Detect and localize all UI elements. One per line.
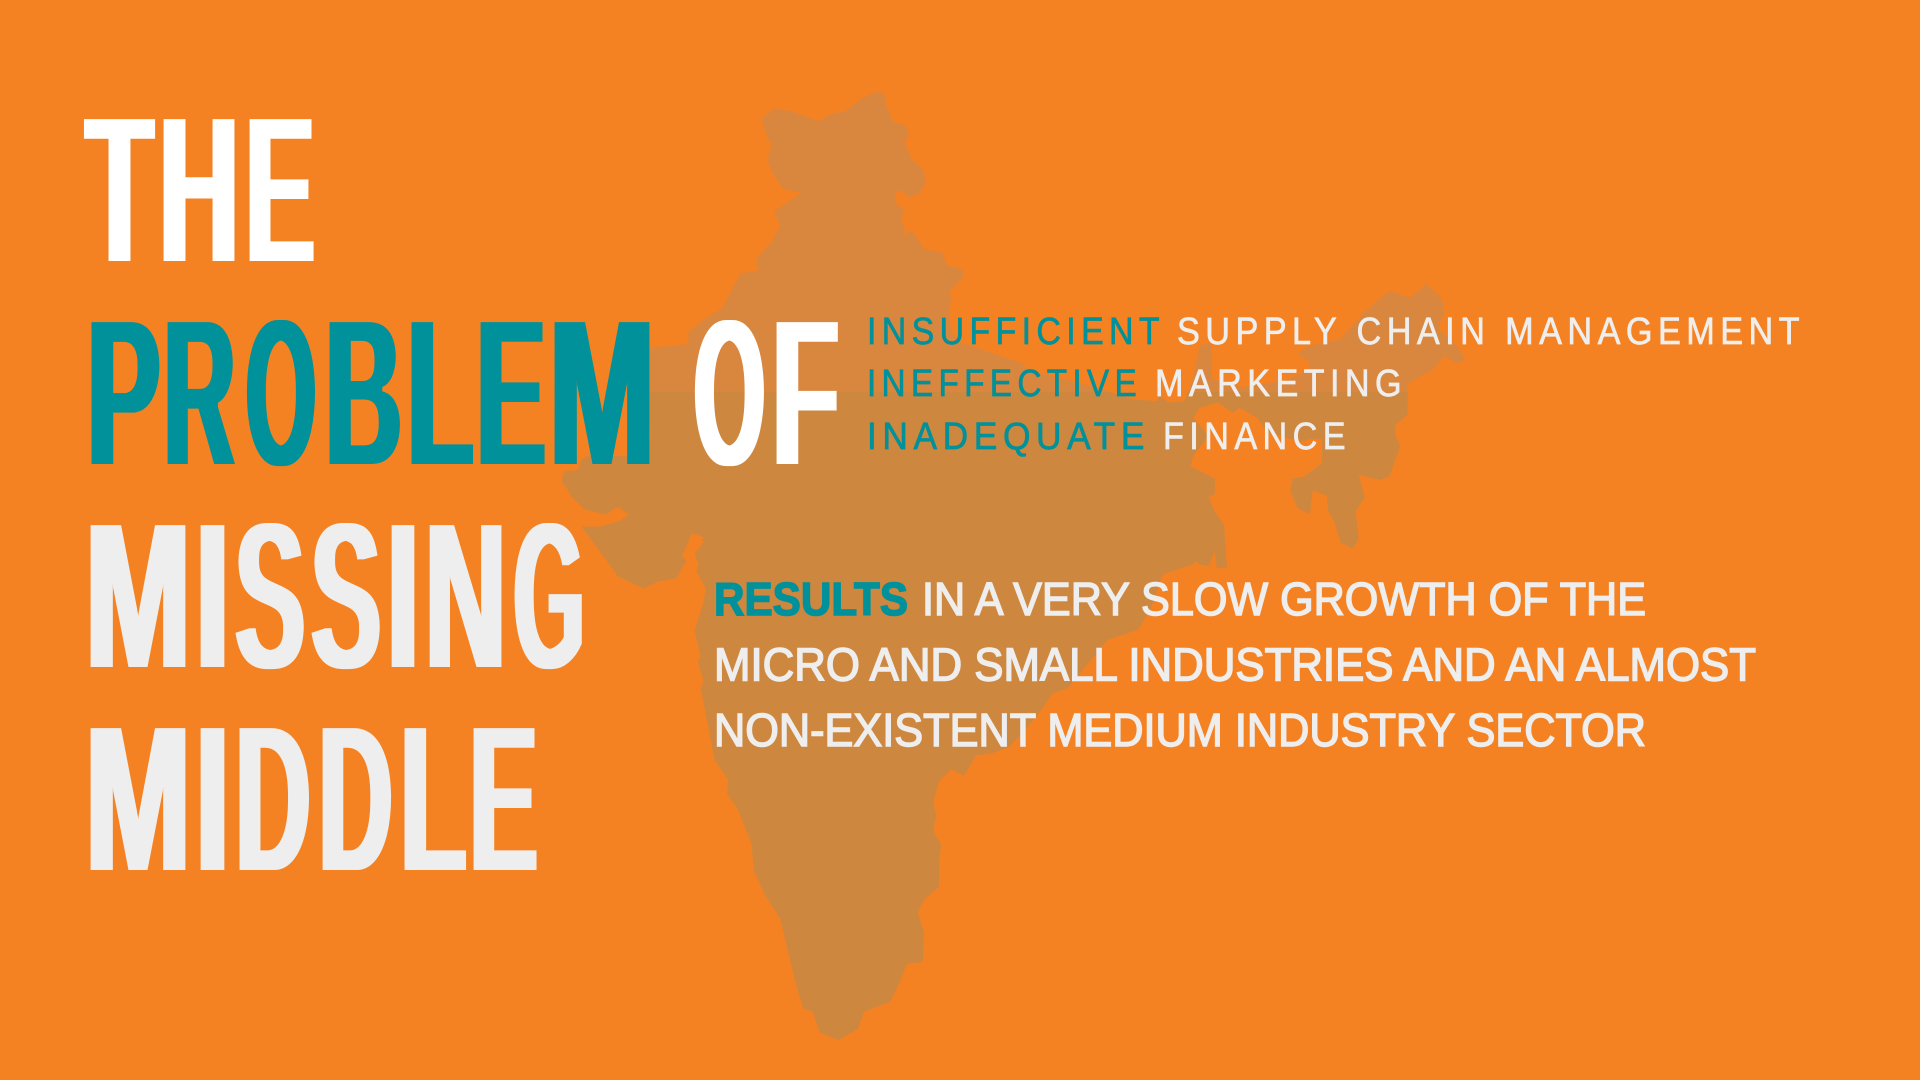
title: THE PROBLEM OF MISSING MIDDLE: E: [246, 71, 315, 308]
cause 3: inadequate finance: INADEQUATE: [867, 416, 1150, 458]
title: THE PROBLEM OF MISSING MIDDLE: E: [470, 680, 538, 917]
title word: MISSING: I: [195, 477, 230, 714]
title word: PROBLEM: L: [407, 274, 473, 511]
title word: MIDDLE: D: [319, 680, 392, 917]
cause 2: ineffective marketing: [867, 363, 1407, 405]
title word: MIDDLE: L: [400, 680, 466, 917]
cause 1: insufficient supply chain management: [867, 311, 1805, 353]
title word: PROBLEM: B: [326, 274, 402, 511]
cause 2: ineffective marketing: MARKETING: [1155, 363, 1407, 405]
title word: OF: O: [694, 274, 765, 511]
title word: MIDDLE: M: [85, 680, 191, 917]
results line 3: NON-EXISTENT MEDIUM INDUSTRY SECTOR: [714, 704, 1646, 756]
cause 3: inadequate finance: [867, 416, 1351, 458]
list of three causes: [867, 311, 1805, 458]
cause 3: inadequate finance: FINANCE: [1163, 416, 1351, 458]
results statement: [714, 573, 1756, 756]
title word: PROBLEM: P: [87, 274, 160, 511]
title word: PROBLEM: E: [477, 274, 546, 511]
title word: PROBLEM: O: [246, 274, 316, 511]
results line 1: IN A VERY SLOW GROWTH OF THE: [922, 573, 1646, 625]
results line 2: MICRO AND SMALL INDUSTRIES AND AN ALMOST: [714, 638, 1756, 690]
title word: MIDDLE: D: [236, 680, 310, 917]
cause 2: ineffective marketing: INEFFECTIVE: [867, 363, 1142, 405]
map of India silhouette: [562, 92, 1466, 1040]
title word: MISSING: I: [387, 477, 419, 714]
results line 1: RESULTS: [714, 573, 908, 625]
title: THE PROBLEM OF MISSING MIDDLE: [85, 71, 839, 917]
title: THE PROBLEM OF MISSING MIDDLE: G: [514, 477, 584, 714]
title word: THE: H: [159, 71, 239, 308]
title word: PROBLEM: R: [164, 274, 235, 511]
title word: OF: F: [772, 274, 839, 511]
title word: THE: T: [86, 71, 153, 308]
title word: MISSING: M: [85, 477, 191, 714]
title word: MISSING: N: [425, 477, 506, 714]
cause 1: insufficient supply chain management: INSUFFICIENT: [867, 311, 1165, 353]
cause 1: insufficient supply chain management: SUPPLY CHAIN MANAGEMENT: [1177, 311, 1805, 353]
title word: PROBLEM: M: [549, 274, 655, 511]
title word: MISSING: S: [235, 477, 305, 714]
title word: MIDDLE: I: [195, 680, 230, 917]
title word: MISSING: S: [311, 477, 381, 714]
